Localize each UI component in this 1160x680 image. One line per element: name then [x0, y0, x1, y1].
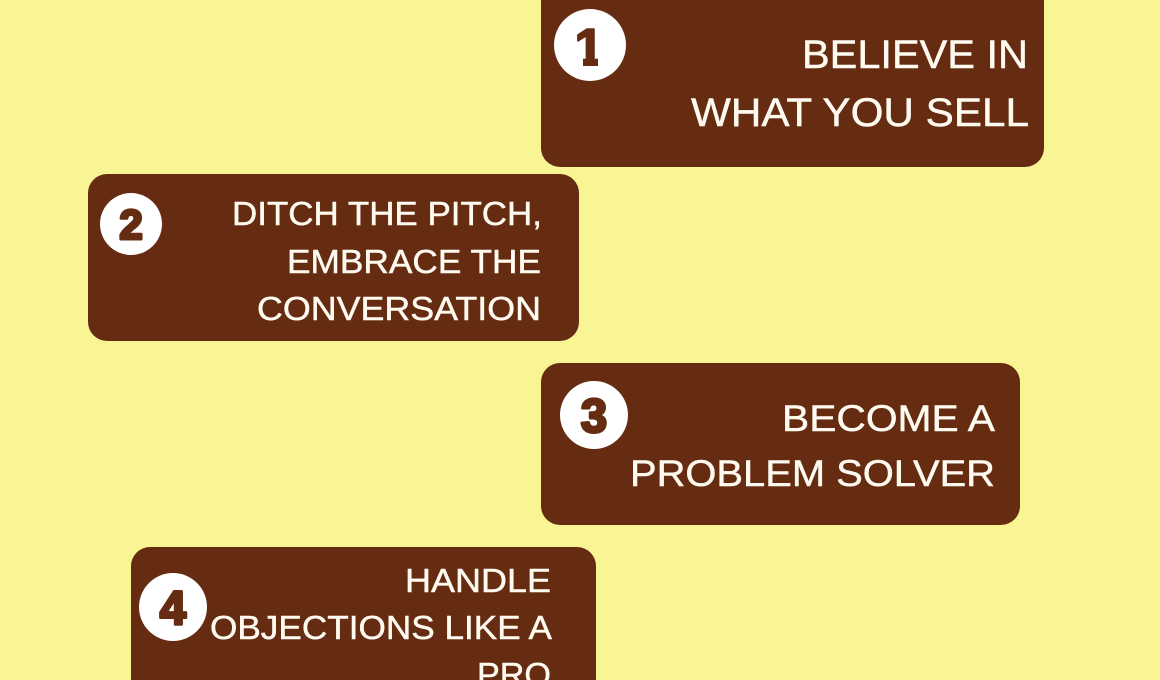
icon: number 4 badge — [139, 573, 207, 641]
panel: step 1 — [541, 0, 1044, 167]
text: ditch the pitch, embrace the conversation: CONVERSATION — [257, 290, 541, 327]
text: believe in what you sell: BELIEVE IN — [802, 33, 1028, 77]
panel: step 2 — [88, 174, 579, 341]
text: become a problem solver — [630, 398, 995, 494]
icon: number 3 badge — [560, 381, 628, 449]
text: become a problem solver: PROBLEM SOLVER — [630, 453, 995, 494]
icon: number 2 badge — [100, 193, 162, 255]
text: ditch the pitch, embrace the conversation: DITCH THE PITCH, — [232, 195, 542, 232]
icon: number 2 badge: 2 — [119, 201, 143, 248]
text: believe in what you sell — [691, 33, 1029, 135]
text: handle objections like a pro: HANDLE — [405, 562, 551, 599]
text: become a problem solver: BECOME A — [782, 398, 995, 439]
text: handle objections like a pro: OBJECTIONS LIKE A — [210, 609, 552, 646]
icon: number 1 badge — [554, 9, 626, 81]
panel: step 3 — [541, 363, 1020, 525]
icon: number 4 badge: 4 — [160, 581, 186, 634]
panel: step 4 — [131, 547, 596, 680]
text: handle objections like a pro — [210, 562, 552, 680]
text: believe in what you sell: WHAT YOU SELL — [691, 91, 1029, 135]
text: ditch the pitch, embrace the conversation — [232, 195, 542, 327]
icon: number 3 badge: 3 — [581, 389, 607, 442]
icon: number 1 badge: 1 — [575, 19, 603, 77]
text: ditch the pitch, embrace the conversation: EMBRACE THE — [287, 243, 541, 280]
